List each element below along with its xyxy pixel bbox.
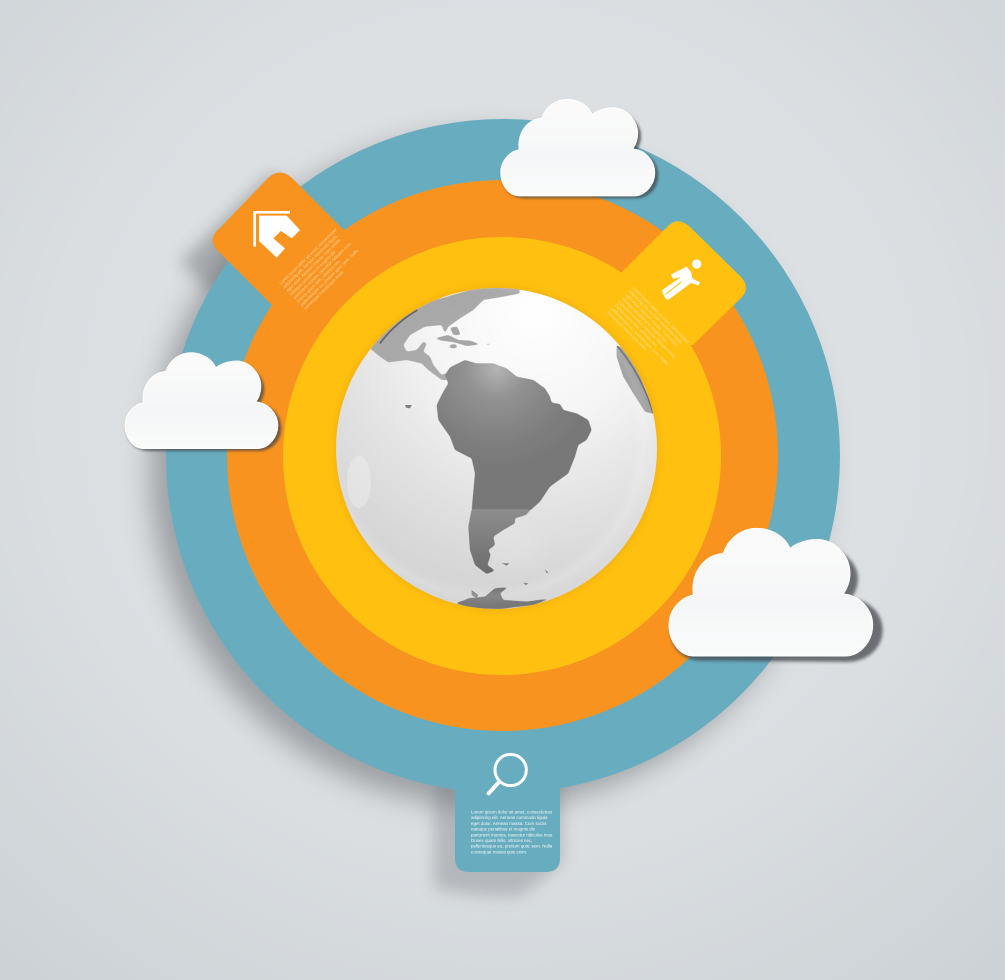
map: Antarctica	[455, 587, 552, 609]
map: small islands	[405, 405, 548, 598]
text block: bottom tab: Lorem ipsum dolor sit amet, consectetuer	[471, 810, 553, 814]
text block: bottom tab: pellentesque eu, pretium quis, sem. Nulla	[471, 844, 553, 849]
map: dark limb edges	[380, 310, 653, 413]
map: southern South America	[468, 509, 531, 574]
panel: yellow tab	[607, 221, 746, 371]
orange tab shadow	[180, 172, 300, 310]
text block: bottom tab: parturient montes, nascetur ridiculus mus.	[471, 832, 553, 837]
globe ocean glare	[480, 521, 540, 569]
panel: orange middle ring	[227, 180, 778, 731]
ring shadow	[150, 133, 824, 807]
text block: orange tab: pellentesque eu, pretium quis, sem. Nulla	[299, 248, 359, 307]
globe rim highlight	[458, 346, 653, 608]
text block: orange tab: adipiscing elit. Aenean commodo ligula	[282, 233, 338, 289]
text block: yellow tab: adipiscing elit. Aenean commodo ligula	[628, 289, 684, 345]
bottom tab shadow	[434, 780, 562, 896]
panel: bottom blue tab	[455, 754, 560, 872]
text block: orange tab: Donec quam felis, ultricies nec,	[296, 258, 342, 304]
text block: yellow tab: eget dolor. Aenean massa. Cum sociis	[624, 292, 679, 347]
panel: yellow inner ring	[283, 237, 721, 675]
map: Caribbean islands	[434, 327, 492, 348]
text block: bottom tab: consequat massa quis enim.	[471, 849, 527, 854]
text block: yellow tab: consequat massa quis enim.	[607, 310, 649, 352]
text block: orange tab: eget dolor. Aenean massa. Cum sociis	[285, 238, 341, 293]
text block: bottom tab: eget dolor. Aenean massa. Cum sociis	[471, 821, 547, 826]
text block: bottom tab: adipiscing elit. Aenean commodo ligula	[471, 815, 548, 820]
text block: orange tab: consequat massa quis enim.	[303, 269, 345, 311]
icon: person	[662, 259, 701, 300]
text block: yellow tab: parturient montes, nascetur ridiculus mus.	[617, 299, 677, 359]
panel: orange tab	[213, 172, 364, 311]
text block: yellow tab: pellentesque eu, pretium quis, sem. Nulla	[610, 306, 670, 366]
text block: bottom tab: Donec quam felis, ultricies nec,	[471, 838, 532, 843]
globe	[334, 283, 660, 612]
text block: yellow tab: natoque penatibus et magnis dis	[621, 296, 668, 343]
cloud: left	[125, 353, 281, 451]
cloud: top	[501, 99, 658, 198]
icon: house	[253, 211, 300, 258]
text block: orange tab: parturient montes, nascetur ridiculus mus.	[292, 241, 353, 300]
text block: orange tab: natoque penatibus et magnis dis	[289, 249, 336, 296]
panel: blue outer ring	[166, 119, 840, 793]
map: North and Central America	[370, 283, 520, 380]
text block: orange tab: Lorem ipsum dolor sit amet, consectetuer	[278, 227, 338, 286]
cloud: lower right	[669, 528, 883, 662]
text block: yellow tab: Lorem ipsum dolor sit amet, consectetuer	[631, 285, 691, 345]
globe glare	[347, 456, 371, 508]
map: South America	[437, 360, 592, 511]
text block: yellow tab: Donec quam felis, ultricies nec,	[614, 303, 659, 348]
map: Africa edge	[617, 345, 654, 414]
text block: bottom tab: natoque penatibus et magnis dis	[471, 827, 536, 832]
icon: magnifying glass	[489, 754, 526, 793]
